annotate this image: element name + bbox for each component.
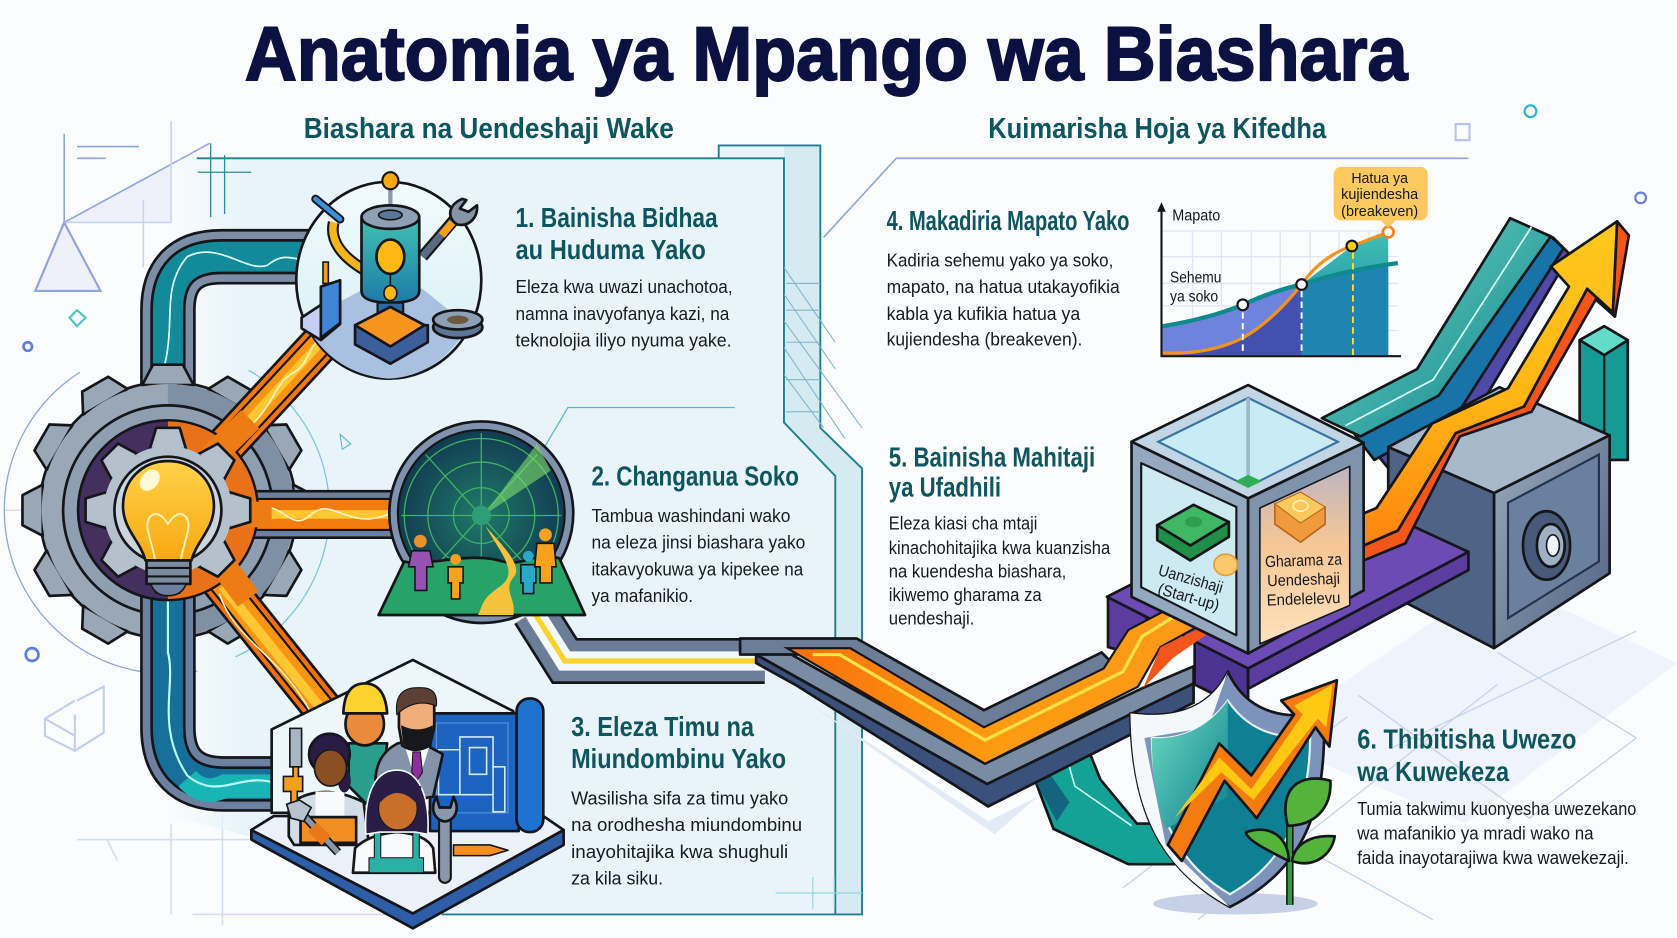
step 4 text: Kadiria sehemu yako ya soko, <box>887 249 1113 270</box>
grid <box>1163 230 1398 355</box>
label: start-up <box>1156 561 1225 615</box>
decoration: blueprint shapes left <box>24 121 428 925</box>
callout: breakeven: kujiendesha <box>1341 186 1419 203</box>
conduit: yellow channel from radar <box>534 612 765 661</box>
revenue area <box>1302 232 1388 355</box>
safe <box>1388 387 1610 648</box>
pipe: lower orange diagonal <box>206 564 323 711</box>
pipe: middle orange horizontal <box>241 508 398 521</box>
line: finance section frame <box>824 158 1468 237</box>
step 1 text: 1. Bainisha Bidhaa <box>516 202 718 233</box>
markers <box>1237 299 1248 310</box>
step 4 text: kujiendesha (breakeven). <box>887 328 1082 349</box>
route red side <box>1143 627 1209 688</box>
step 5 text: na kuendesha biashara, <box>889 561 1066 582</box>
man with beard <box>375 688 443 802</box>
step 5 text: uendeshaji. <box>889 608 974 629</box>
callout: breakeven <box>1334 167 1428 228</box>
route orange core <box>787 610 1203 764</box>
step 1 text <box>516 202 733 351</box>
step 6 text: Tumia takwimu kuonyesha uwezekano <box>1357 798 1636 819</box>
step 6 text: wa Kuwekeza <box>1356 756 1510 787</box>
step 2 text: na eleza jinsi biashara yako <box>591 532 805 553</box>
step 4 text: 4. Makadiria Mapato Yako <box>887 205 1129 236</box>
teal bar <box>1580 326 1628 460</box>
drop lines <box>1243 291 1302 355</box>
cube: funding <box>1132 385 1364 653</box>
title: Anatomia ya Mpango wa Biashara <box>245 12 1408 97</box>
label: operating costs: Uendeshaji <box>1267 570 1340 590</box>
purple and orange ring <box>78 419 272 600</box>
axes <box>1161 208 1401 356</box>
axis label market share: ya soko <box>1170 288 1218 306</box>
step 3 text: 3. Eleza Timu na <box>571 711 754 742</box>
woman in front <box>353 770 435 873</box>
curves <box>1163 263 1398 326</box>
panel: business and operations <box>0 143 862 914</box>
step 5 text: ikiwemo gharama za <box>889 584 1042 605</box>
axis label market share: Sehemu <box>1170 268 1221 286</box>
step 5 text <box>889 441 1111 629</box>
route upper rail <box>740 639 1118 738</box>
step 1 text: au Huduma Yako <box>516 234 706 265</box>
pencil <box>453 845 508 856</box>
wrench <box>433 797 457 877</box>
label: operating costs: Gharama za <box>1265 550 1342 571</box>
map terrain <box>379 526 585 623</box>
people <box>409 528 556 599</box>
step 2 text: 2. Changanua Soko <box>591 461 799 492</box>
step 5 text: kinachohitajika kwa kuanzisha <box>889 537 1111 558</box>
chart: market share and revenue <box>1157 167 1428 356</box>
icon: team and infrastructure <box>251 660 564 928</box>
axis label: Mapato <box>1172 206 1220 224</box>
platform <box>251 816 564 928</box>
step 3 text: na orodhesha miundombinu <box>571 814 802 835</box>
icon: cash stack <box>1157 505 1229 560</box>
label: operating costs <box>1265 550 1342 610</box>
icon: gear core with light bulb <box>78 419 272 600</box>
heading: business and operations: Biashara na Uendeshaji Wake <box>304 113 674 145</box>
step 3 text: za kila siku. <box>571 868 663 889</box>
icon: coin stack <box>1275 492 1325 542</box>
axis label market share <box>1170 268 1221 306</box>
step 4 text: kabla ya kufikia hatua ya <box>887 303 1081 324</box>
builder with hard hat <box>343 683 387 804</box>
woman with tools <box>283 728 369 852</box>
label: start-up: Uanzishaji <box>1156 561 1225 597</box>
base <box>355 307 428 364</box>
step 6 text: 6. Thibitisha Uwezo <box>1357 724 1576 755</box>
decoration: floor grid right <box>1123 105 1677 920</box>
safe dial <box>1523 511 1570 580</box>
step 1 text: teknolojia iliyo nyuma yake. <box>516 330 732 351</box>
pipe: top teal <box>164 252 321 396</box>
disk <box>433 310 482 338</box>
callout: breakeven: (breakeven) <box>1341 203 1418 220</box>
conduit: orange route to cube <box>740 610 1209 834</box>
blueprint <box>430 698 543 832</box>
pipe: teal lower section <box>1035 740 1182 864</box>
icon: shield with growth arrow <box>1130 672 1337 914</box>
pipe: upper orange diagonal <box>217 337 326 455</box>
step 2 text <box>591 461 805 606</box>
pencil and yellow arm <box>316 199 364 270</box>
pipe: bottom teal <box>168 597 294 790</box>
step 5 text: ya Ufadhili <box>889 471 1001 502</box>
big growth arrow <box>1364 221 1629 560</box>
step 4 text <box>887 205 1129 349</box>
step 4 text: mapato, na hatua utakayofikia <box>887 276 1120 297</box>
icon: plant sprout <box>1246 779 1335 905</box>
left face <box>1141 463 1237 635</box>
backdrop <box>272 660 513 813</box>
step 3 text: Miundombinu Yako <box>571 743 786 774</box>
step 3 text: Wasilisha sifa za timu yako <box>571 787 788 808</box>
wrench <box>422 199 477 257</box>
purple platform <box>1107 526 1468 711</box>
route side <box>756 655 1194 806</box>
step 6 text <box>1356 724 1636 868</box>
step 2 text: ya mafanikio. <box>591 585 693 606</box>
step 5 text: Eleza kiasi cha mtaji <box>889 512 1037 533</box>
step 2 text: itakavyokuwa ya kipekee na <box>591 558 804 579</box>
right face <box>1260 466 1350 644</box>
device box <box>302 262 340 340</box>
label: operating costs: Endelelevu <box>1266 589 1341 610</box>
step 1 text: namna inavyofanya kazi, na <box>516 303 730 324</box>
step 5 text: 5. Bainisha Mahitaji <box>889 441 1095 472</box>
callout: breakeven: Hatua ya <box>1351 170 1409 187</box>
teal ribbon behind big arrow <box>1322 218 1570 471</box>
label: start-up: (Start-up) <box>1156 580 1221 615</box>
route shadow <box>797 695 1037 834</box>
inner gear <box>86 428 250 593</box>
icon: product machine in circle <box>296 172 482 379</box>
step 3 text: inayohitajika kwa shughuli <box>571 841 788 862</box>
cylinder <box>361 172 419 324</box>
handheld tools <box>283 728 338 852</box>
step 6 text: wa mafanikio ya mradi wako na <box>1356 823 1594 844</box>
step 3 text <box>571 711 802 889</box>
heading: financial case: Kuimarisha Hoja ya Kifedha <box>988 113 1327 145</box>
step 1 text: Eleza kwa uwazi unachotoa, <box>516 276 733 297</box>
route lower rail <box>756 655 1194 784</box>
icon: radar and market map <box>379 421 585 623</box>
icon: outer gear <box>22 365 313 656</box>
bulb <box>123 461 214 596</box>
step 2 text: Tambua washindani wako <box>591 505 790 526</box>
route highlight <box>813 612 1182 740</box>
step 6 text: faida inayotarajiwa kwa wawekezaji. <box>1357 847 1629 868</box>
